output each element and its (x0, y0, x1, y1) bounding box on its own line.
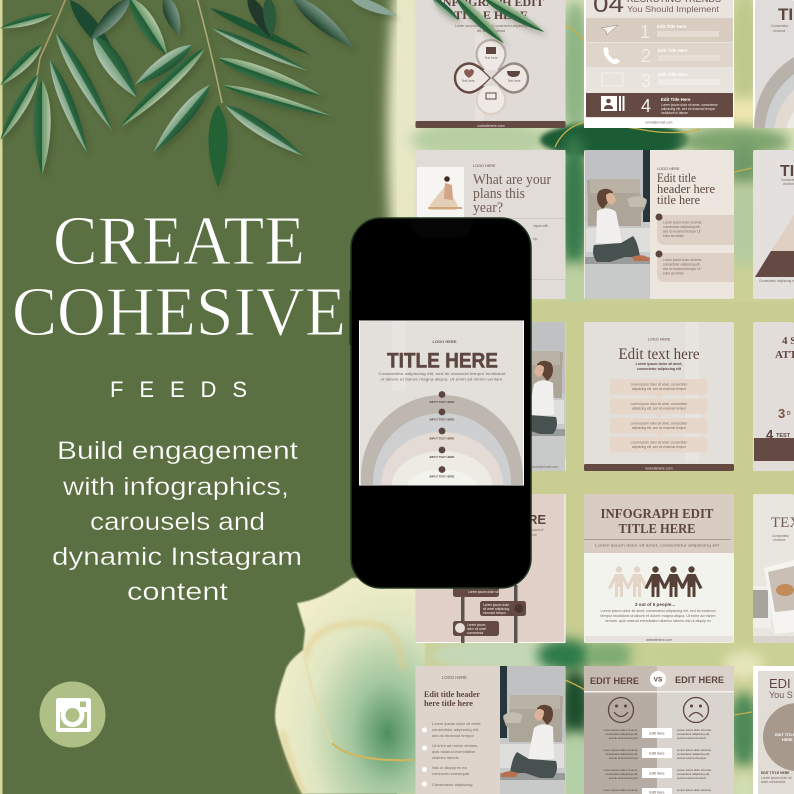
card: 3 out of 5 people (584, 494, 734, 643)
right column text: Lorem ipsum dolor sit amet, (677, 748, 712, 752)
comparison header: EDIT HERE (590, 676, 639, 686)
edit labels: Edit here (649, 772, 665, 776)
left column text: consectetur adipiscing elit, (605, 732, 638, 736)
headline: year? (473, 200, 503, 216)
stat body (600, 609, 716, 623)
petal diagram: Text here (507, 79, 521, 83)
left column text: consectetur adipiscing elit, (605, 772, 638, 776)
stat body: Lorem ipsum dolor sit amet, consectetur adipiscing elit, sed do eiusmod (600, 609, 716, 613)
rainbow arcs (361, 395, 523, 486)
card: edit title circle (cropped): You S (769, 690, 793, 700)
bullet list: commodo consequat (432, 771, 470, 776)
contact text: here@email.com (532, 465, 558, 469)
card: photo with bullets (416, 666, 566, 794)
item 1: enim ad minim (663, 234, 684, 238)
bullet list: Nisi ut aliquip ex ea (432, 765, 467, 770)
heading text: You Should Implement (627, 5, 720, 14)
card: attention right (cropped): 4 (766, 427, 774, 442)
timeline box 3 (453, 621, 499, 636)
photo: woman sitting (585, 150, 650, 299)
headline: INFOGRAPH EDIT (600, 507, 714, 522)
footer (585, 636, 733, 642)
headline: TITLE HERE (618, 522, 696, 537)
list rows: 4 (641, 96, 651, 116)
step boxes: Lorem ipsum dolor sit amet, consectetur (631, 402, 688, 406)
stat label: 3 out of 5 people... (635, 602, 675, 607)
comparison header: VS (654, 676, 663, 684)
card intro text: Lorem ipsum dolor sit amet, consectetur adipiscing (455, 24, 527, 28)
step boxes: adipiscing elit, sed do eiusmod tempor (632, 387, 687, 391)
list rows: Lorem ipsum dolor sit amet, consectetur (661, 103, 719, 107)
arc markers and labels: INPUT TEXT HERE (430, 418, 455, 422)
item 2: enim ad minim (663, 272, 684, 276)
arc markers and labels: INPUT TEXT HERE (430, 436, 455, 440)
body text (533, 224, 548, 241)
subheading: feeds: FEEDS (110, 377, 247, 402)
card: four petals infographic (416, 0, 566, 128)
headline: title here (657, 192, 700, 207)
card: attention right (cropped): TEST (776, 433, 791, 439)
logo label: LOGO HERE (442, 675, 467, 680)
card: text with polaroids (cropped) (753, 494, 794, 643)
card: versus comparison (584, 666, 734, 794)
card: 3 out of 5 people: websitehere.com (646, 638, 672, 642)
card: attention right (cropped): 3 (778, 406, 785, 421)
bullet list: consectetur adipiscing elit, (432, 727, 479, 732)
body text: Build engagement (57, 437, 298, 465)
card: edit title circle (cropped): Lorem ipsum dolor sit (761, 776, 792, 780)
headline (473, 172, 551, 216)
right column text: consectetur adipiscing elit, (677, 752, 710, 756)
card: rainbow right (cropped): Consectetur (771, 24, 789, 28)
comparison header (584, 666, 734, 692)
card: four petals infographic: websitehere.com (477, 124, 505, 128)
body text: content (127, 578, 228, 606)
item 1: sed do eiusmod tempor Ut (663, 230, 700, 234)
background: gold veins (555, 25, 752, 715)
arc markers and labels (430, 391, 455, 478)
headline: here title here (424, 699, 473, 708)
card: text with polaroids (cropped): ut labore (773, 538, 786, 542)
heading: create: CREATE (53, 203, 305, 280)
step boxes: Lorem ipsum dolor sit amet, consectetur (631, 440, 688, 444)
card: row three photo card (416, 322, 566, 471)
left column text: Lorem ipsum dolor sit amet, (603, 788, 638, 792)
step boxes (610, 379, 707, 452)
phone notch (410, 219, 474, 238)
list rows: Edit Title Here (658, 48, 688, 53)
card: text with polaroids (cropped): Consectetur (772, 534, 790, 538)
branch of leaves (0, 0, 398, 187)
list rows: 2 (641, 46, 651, 66)
headline: plans this (473, 186, 525, 202)
left column text: Lorem ipsum dolor sit amet, (603, 748, 638, 752)
headline: What are your (473, 172, 551, 188)
body text: dynamic Instagram (52, 543, 302, 571)
list rows: adipiscing elit, sed do eiusmod tempor (661, 107, 716, 111)
card footer (416, 121, 566, 128)
timeline box 2 (480, 601, 526, 616)
card: edit title circle (cropped): EDIT TITLE HERE (761, 771, 790, 775)
edit labels (642, 728, 672, 794)
step boxes: adipiscing elit, sed do eiusmod tempor (632, 426, 687, 430)
timeline box 3: Lorem ipsum (467, 623, 486, 627)
timeline box 3: dolor sit amet (467, 627, 486, 631)
logo label: LOGO HERE (648, 338, 671, 342)
post intro text: ut labore et dolore magna aliqua. Ut enim ad minim veniam. (380, 376, 504, 382)
phone screen post (359, 320, 524, 486)
card: what are your plans (416, 150, 566, 299)
icon: smiley (608, 698, 634, 722)
icon: instagram (40, 682, 106, 748)
headline: Edit title header (424, 690, 480, 699)
subheading (636, 362, 682, 371)
body text: with infographics, (62, 473, 289, 501)
comparison header: EDIT HERE (675, 675, 724, 685)
headline: header here (657, 181, 715, 196)
card title: TITLE HERE (454, 8, 528, 22)
subheading: Lorem ipsum dolor sit amet, (636, 362, 682, 366)
footer text: email@email.com (646, 120, 673, 124)
card: pyramid right (cropped) (753, 150, 794, 299)
item 1: consectetur adipiscing elit, (663, 225, 700, 229)
icon: laptop (602, 73, 623, 86)
leaves over top card (429, 0, 547, 47)
card: edit title circle (cropped): amet consectetur (761, 780, 786, 784)
card: rainbow right (cropped): ut labore (773, 29, 786, 33)
post title: TITLE HERE (387, 350, 498, 372)
list rows: 1 (640, 22, 650, 42)
card: edit title circle (cropped) (753, 666, 794, 794)
body text (52, 437, 302, 606)
step boxes: adipiscing elit, sed do eiusmod tempor (632, 445, 687, 449)
intro fragment: ore (532, 533, 537, 537)
item 2: consectetur adipiscing elit, (663, 262, 700, 266)
polaroid photos (753, 560, 794, 634)
icon: phone (604, 47, 620, 64)
step boxes: Lorem ipsum dolor sit amet, consectetur (631, 422, 688, 426)
item 2: Lorem ipsum dolor sit amet, (663, 258, 702, 262)
heading: cohesive: COHESIVE (12, 274, 346, 351)
icon: paper plane (601, 25, 618, 35)
list rows (586, 18, 733, 117)
bullet list: sed do eiusmod tempor (432, 733, 474, 738)
footer (584, 464, 734, 471)
background: watercolor area (387, 0, 794, 794)
item 2 (656, 250, 734, 282)
right column text: consectetur adipiscing elit, (677, 732, 710, 736)
people icons (608, 566, 702, 597)
left column text: sed do eiusmod tempor (609, 776, 638, 780)
list rows: 3 (641, 71, 651, 91)
post logo: LOGO HERE (432, 339, 457, 344)
item 1 (656, 214, 734, 245)
card title (438, 0, 544, 22)
right column text: sed do eiusmod tempor (677, 736, 706, 740)
card: edit title circle (cropped): HERE (782, 738, 793, 742)
background: pale edge stripe (0, 0, 2, 794)
background: watercolor flower (275, 578, 425, 794)
right column text: Lorem ipsum dolor sit amet, (677, 768, 712, 772)
card: timeline (416, 494, 566, 643)
list rows: Edit Title Here (661, 97, 691, 102)
post intro text: Consectetur adipiscing elit, sed do eiusmod tempor incididunt (378, 371, 507, 376)
bullet list: quis nostrud exercitation (432, 749, 475, 754)
stat body: tempor incididunt ut labore et dolore magna aliqua. Ut enim ad minim (600, 614, 716, 618)
petal diagram: Text here (484, 56, 498, 60)
bullet list: ullamco laboris (432, 755, 459, 760)
card: edit title with photo (584, 150, 734, 299)
card: recruiting trends (584, 0, 734, 128)
item 1: Lorem ipsum dolor sit amet, (663, 220, 702, 224)
phone mockup (350, 218, 531, 588)
card: edit text here: websitehere.com (645, 467, 673, 471)
left column text: Lorem ipsum dolor sit amet, (603, 768, 638, 772)
headline (600, 507, 714, 537)
body text: trip (533, 237, 538, 241)
list rows: Edit Title Here (658, 72, 688, 77)
timeline box 2: eiusmod tempor (483, 611, 507, 615)
timeline box 2: Lorem ipsum dolor (483, 603, 510, 607)
right column text: sed do eiusmod tempor (677, 756, 706, 760)
headline: Edit title (657, 170, 696, 185)
left column text: consectetur adipiscing elit, (605, 752, 638, 756)
left column text: sed do eiusmod tempor (609, 756, 638, 760)
step boxes: adipiscing elit, sed do eiusmod tempor (632, 406, 687, 410)
icon: sad face (684, 698, 708, 722)
card intro text (455, 24, 527, 33)
step boxes: Lorem ipsum dolor sit amet, consectetur (631, 382, 688, 386)
edit labels: Edit here (649, 752, 665, 756)
title fragment: RE (528, 512, 546, 527)
timeline box 1: Lorem ipsum dolor sit (468, 590, 499, 594)
list rows: Edit Title Here (657, 24, 687, 29)
card: edit title circle (cropped): EDI (769, 676, 791, 691)
right column text: Lorem ipsum dolor sit amet, (677, 788, 712, 792)
right column text: consectetur adipiscing elit, (677, 772, 710, 776)
arc markers and labels: INPUT TEXT HERE (430, 455, 455, 459)
left column text: sed do eiusmod tempor (609, 736, 638, 740)
timeline bars (461, 585, 518, 643)
bullet list (422, 721, 481, 787)
headline (424, 690, 480, 708)
body text: carousels and (90, 508, 265, 536)
card: rainbow right (cropped): TI (778, 5, 793, 24)
right column text (677, 728, 712, 792)
post intro text (378, 372, 506, 382)
timeline box 2: sit amet adipiscing (483, 607, 509, 611)
photo: woman sitting, flipped (500, 322, 565, 471)
right column text: Lorem ipsum dolor sit amet, (677, 728, 712, 732)
logo label: LOGO HERE (657, 167, 680, 171)
subheading: consectetur adipiscing elit (637, 367, 682, 371)
item 2: sed do eiusmod tempor Ut (663, 267, 700, 271)
icon: profile card (601, 96, 624, 111)
left column text: Lorem ipsum dolor sit amet, (603, 728, 638, 732)
logo label: LOGO HERE (473, 164, 496, 168)
header band (584, 494, 734, 553)
timeline box 1 (453, 587, 499, 597)
edit labels: Edit here (649, 732, 665, 736)
card: attention right (cropped): D (787, 411, 791, 417)
photo: woman sitting, flipped (500, 666, 565, 794)
bullet list: Lorem ipsum dolor sit amet, (432, 721, 481, 726)
headline: Edit text here (618, 346, 700, 363)
card intro text: elit, sed do eiusmod (477, 29, 505, 33)
left column text (603, 728, 638, 792)
list rows: incididunt ut labore (661, 111, 688, 115)
heading text (627, 0, 721, 14)
body text: Japan with (533, 224, 548, 228)
arc markers and labels: INPUT TEXT HERE (430, 474, 455, 478)
card: attention right (cropped) (753, 322, 794, 471)
petal diagram: Text here (461, 79, 475, 83)
headline (657, 170, 715, 207)
subheading: Lorem ipsum dolor sit amet, consectetur adipiscing elit (595, 542, 720, 548)
petal diagram (455, 40, 528, 114)
photo: woman on bed (417, 167, 464, 218)
arc markers and labels: INPUT TEXT HERE (430, 400, 455, 404)
card: edit text here (584, 322, 734, 471)
intro fragment: count of (532, 528, 543, 532)
card: pyramid right (cropped): TI (780, 163, 794, 180)
intro fragment (532, 528, 543, 537)
timeline box 3: consectetur (467, 631, 484, 635)
card: rainbow right (cropped) (753, 0, 794, 128)
bullet list: Ut enim ad minim veniam, (432, 743, 478, 748)
right column text: sed do eiusmod tempor (677, 776, 706, 780)
bullet list: Consectetur adipiscing (432, 782, 472, 787)
background: green panel (0, 0, 398, 794)
stat body: veniam, quis nostrud exercitation ullamco laboris nisi ut aliquip ex (605, 619, 711, 623)
